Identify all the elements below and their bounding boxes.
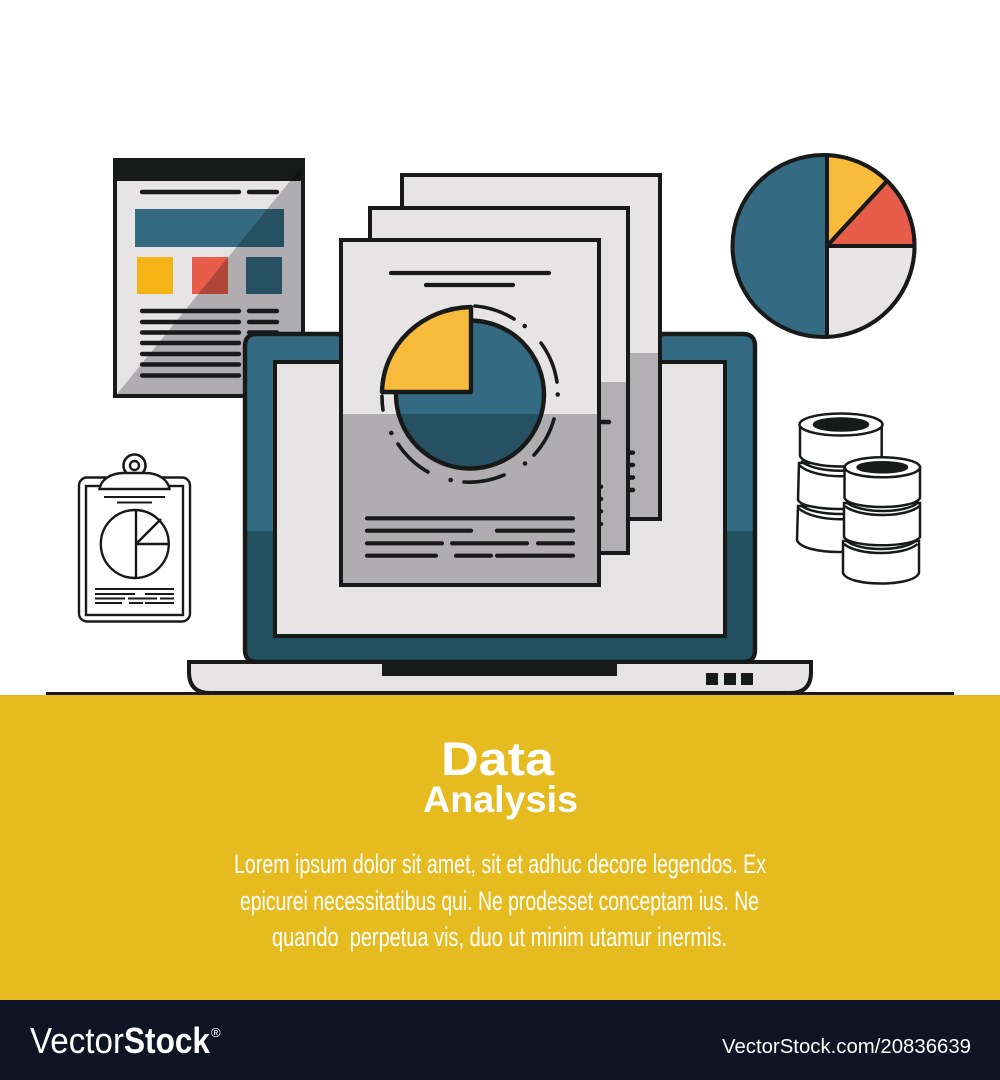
back stack bbox=[797, 414, 882, 552]
body text: epicurei necessitatibus qui. Ne prodesset conceptam ius. Ne bbox=[240, 886, 759, 916]
body text bbox=[234, 849, 766, 952]
ground line bbox=[46, 692, 954, 695]
back report page bbox=[402, 175, 660, 519]
front report page with pie chart bbox=[341, 240, 599, 585]
icon: pie chart bbox=[732, 155, 914, 337]
icon: laptop bbox=[189, 334, 811, 693]
footer logo: VectorStock: Stock bbox=[124, 1020, 211, 1061]
footer image id: VectorStock.com/20836639 bbox=[722, 1036, 971, 1058]
panel: yellow title band bbox=[0, 695, 1000, 1000]
body text: Lorem ipsum dolor sit amet, sit et adhuc decore legendos. Ex bbox=[234, 849, 766, 879]
laptop screen bbox=[275, 362, 725, 636]
middle report page bbox=[370, 208, 628, 553]
footer logo: VectorStock: ® bbox=[211, 1025, 221, 1040]
laptop base bbox=[189, 661, 811, 693]
icon: clipboard with pie chart bbox=[79, 454, 190, 622]
front stack bbox=[843, 457, 920, 584]
title: Analysis: Analysis bbox=[423, 779, 578, 820]
pie chart: dashed orbit bbox=[382, 306, 560, 482]
page text lines bbox=[367, 273, 573, 556]
title: Data: Data bbox=[441, 732, 555, 785]
footer logo: VectorStock: Vector bbox=[30, 1020, 124, 1061]
pie chart: yellow slice bbox=[382, 307, 471, 392]
icon: database stacks bbox=[797, 414, 920, 584]
pie chart: teal disc bbox=[396, 320, 544, 468]
laptop lid bbox=[245, 334, 755, 662]
body text: quando perpetua vis, duo ut minim utamur inermis. bbox=[272, 922, 727, 952]
footer bar bbox=[0, 1000, 1000, 1080]
icon: web page document bbox=[113, 158, 305, 396]
footer logo: VectorStock bbox=[30, 1020, 221, 1061]
